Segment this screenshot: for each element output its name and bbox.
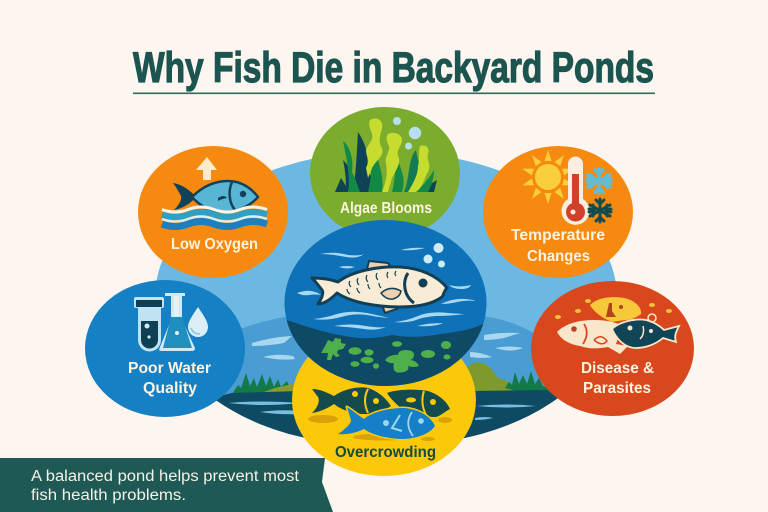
- panel: overcrowding: [292, 324, 476, 476]
- icon: lily pads: [321, 338, 451, 373]
- icon: fish on waves: [162, 181, 267, 226]
- icon: bubbles: [393, 117, 421, 150]
- title underline: [133, 92, 655, 94]
- icon: algae: [335, 118, 437, 192]
- pond floor: [286, 320, 484, 386]
- grass bank: [232, 373, 288, 393]
- icon: bubbles: [424, 243, 445, 268]
- label: low oxygen: Low Oxygen: [171, 236, 258, 253]
- banner text: fish health problems.: [31, 487, 186, 504]
- icon: yellow fish: [590, 297, 641, 322]
- banner text: [31, 468, 300, 504]
- dark pond water: [216, 390, 558, 438]
- icon: flask: [159, 293, 195, 351]
- label: poor water quality: Quality: [143, 380, 197, 397]
- label: algae blooms: Algae Blooms: [340, 200, 432, 217]
- panel: disease and parasites: [531, 281, 694, 416]
- pond scene: [150, 148, 620, 450]
- icon: test tube: [134, 297, 164, 352]
- icon: cream fish: [557, 320, 628, 354]
- panel: central pond fish: [280, 220, 490, 392]
- label: disease and parasites: Disease &: [581, 360, 654, 377]
- icon: light snowflake: [587, 169, 611, 193]
- icon: up arrow: [196, 157, 217, 180]
- label: poor water quality: [128, 360, 211, 397]
- label: overcrowding: Overcrowding: [335, 444, 436, 461]
- icon: droplet: [188, 307, 208, 337]
- icon: spots: [555, 299, 672, 319]
- icon: sun: [521, 150, 575, 204]
- icon: thermometer: [562, 157, 590, 225]
- label: temperature changes: Temperature: [511, 227, 605, 244]
- label: temperature changes: [511, 227, 605, 265]
- icon: dark fish left: [312, 387, 391, 414]
- label: temperature changes: Changes: [527, 248, 590, 265]
- panel: temperature changes: [483, 146, 633, 278]
- label: disease and parasites: Parasites: [583, 380, 651, 397]
- waves: [162, 207, 267, 226]
- banner text: A balanced pond helps prevent most: [31, 468, 300, 485]
- icon: blue fish: [338, 407, 435, 439]
- panel: algae blooms: [310, 107, 460, 239]
- panel: poor water quality: [85, 280, 245, 417]
- water ripples: [297, 248, 475, 330]
- icon: main fish: [312, 261, 447, 313]
- label: disease and parasites: [581, 360, 654, 397]
- icon: dark fish: [612, 314, 679, 348]
- icon: dark snowflake: [589, 199, 611, 222]
- label: poor water quality: Poor Water: [128, 360, 211, 377]
- icon: dark fish right: [387, 390, 450, 417]
- icon: shadows: [308, 415, 452, 441]
- banner: [0, 458, 333, 512]
- panel: low oxygen: [138, 146, 288, 278]
